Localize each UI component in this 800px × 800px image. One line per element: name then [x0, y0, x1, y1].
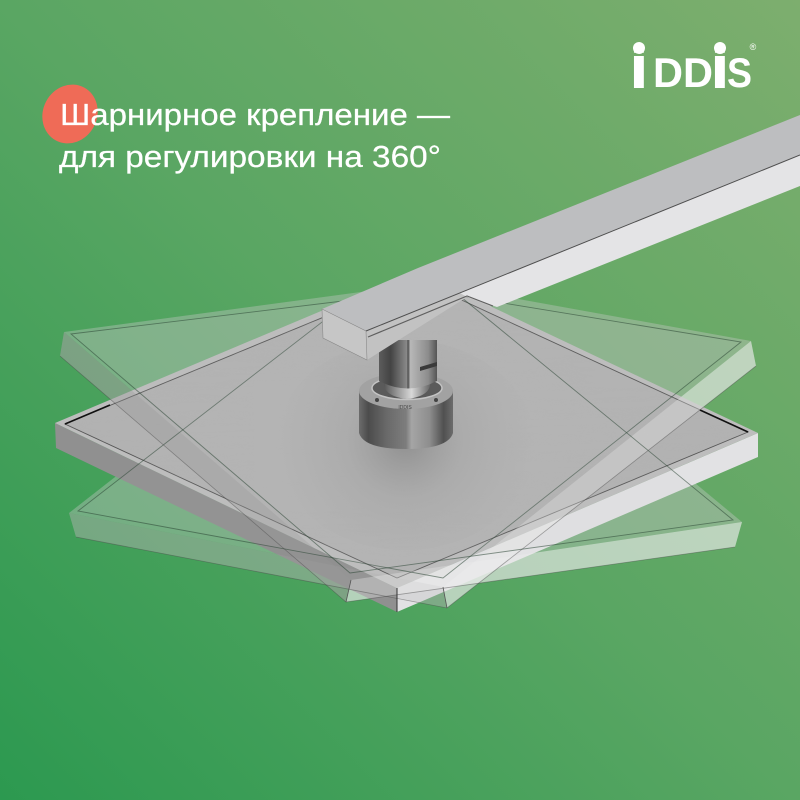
plate overlays: translucent rims and inner outlines	[60, 288, 756, 612]
heading accent blob	[32, 75, 108, 153]
arm centre line	[366, 155, 800, 331]
logo wordmark: i	[631, 36, 647, 100]
shower arm	[322, 115, 800, 360]
heading text: Шарнирное крепление —	[60, 97, 450, 132]
ball joint mount	[359, 340, 453, 449]
shower head: three plate positions	[55, 271, 758, 612]
cylinder recess	[372, 376, 442, 400]
arm edge shadow	[368, 296, 493, 337]
logo wordmark: S	[727, 49, 752, 96]
neck	[379, 340, 437, 388]
arm top face	[322, 115, 800, 331]
arm side face	[460, 155, 800, 307]
registered mark: ®	[750, 42, 757, 52]
logo dots	[633, 42, 726, 54]
base cylinder	[359, 391, 453, 449]
cylinder top ring	[359, 373, 453, 409]
logo wordmark: D	[683, 49, 713, 96]
block side face	[366, 289, 493, 360]
inner ball	[384, 381, 430, 399]
block front face	[322, 309, 367, 360]
logo	[631, 36, 757, 100]
plate: central position	[55, 271, 758, 612]
logo wordmark: i	[712, 36, 728, 100]
central shadow on plate	[275, 340, 535, 550]
plate: lower tilted position	[69, 283, 756, 608]
ring screws and mark: IDDIS	[398, 405, 412, 411]
plate: upper tilted position	[60, 280, 742, 602]
neck notch	[420, 362, 437, 371]
heading text: для регулировки на 360°	[59, 139, 441, 174]
heading	[32, 75, 459, 174]
logo wordmark: D	[653, 49, 683, 96]
